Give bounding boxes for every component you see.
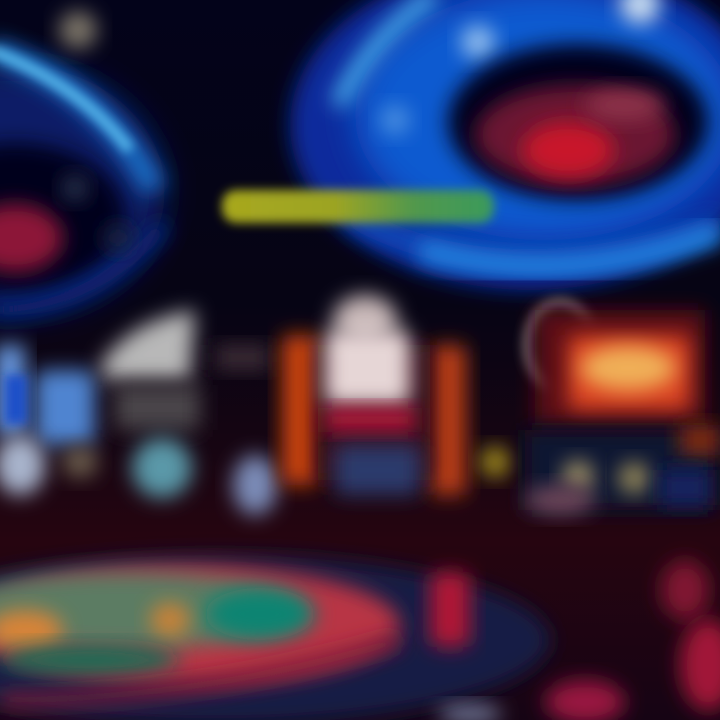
ceiling ring: left xyxy=(0,11,165,315)
yellow-green banner xyxy=(222,190,494,223)
gaming table xyxy=(0,555,550,720)
slot machine: right with glowing screen xyxy=(525,303,720,515)
ceiling ring: right xyxy=(290,0,720,290)
slot machines: left group xyxy=(0,345,98,495)
slot machine: grey xyxy=(100,310,277,515)
foreground red seats xyxy=(438,560,720,720)
slot machine: centre with orange columns xyxy=(282,295,510,495)
